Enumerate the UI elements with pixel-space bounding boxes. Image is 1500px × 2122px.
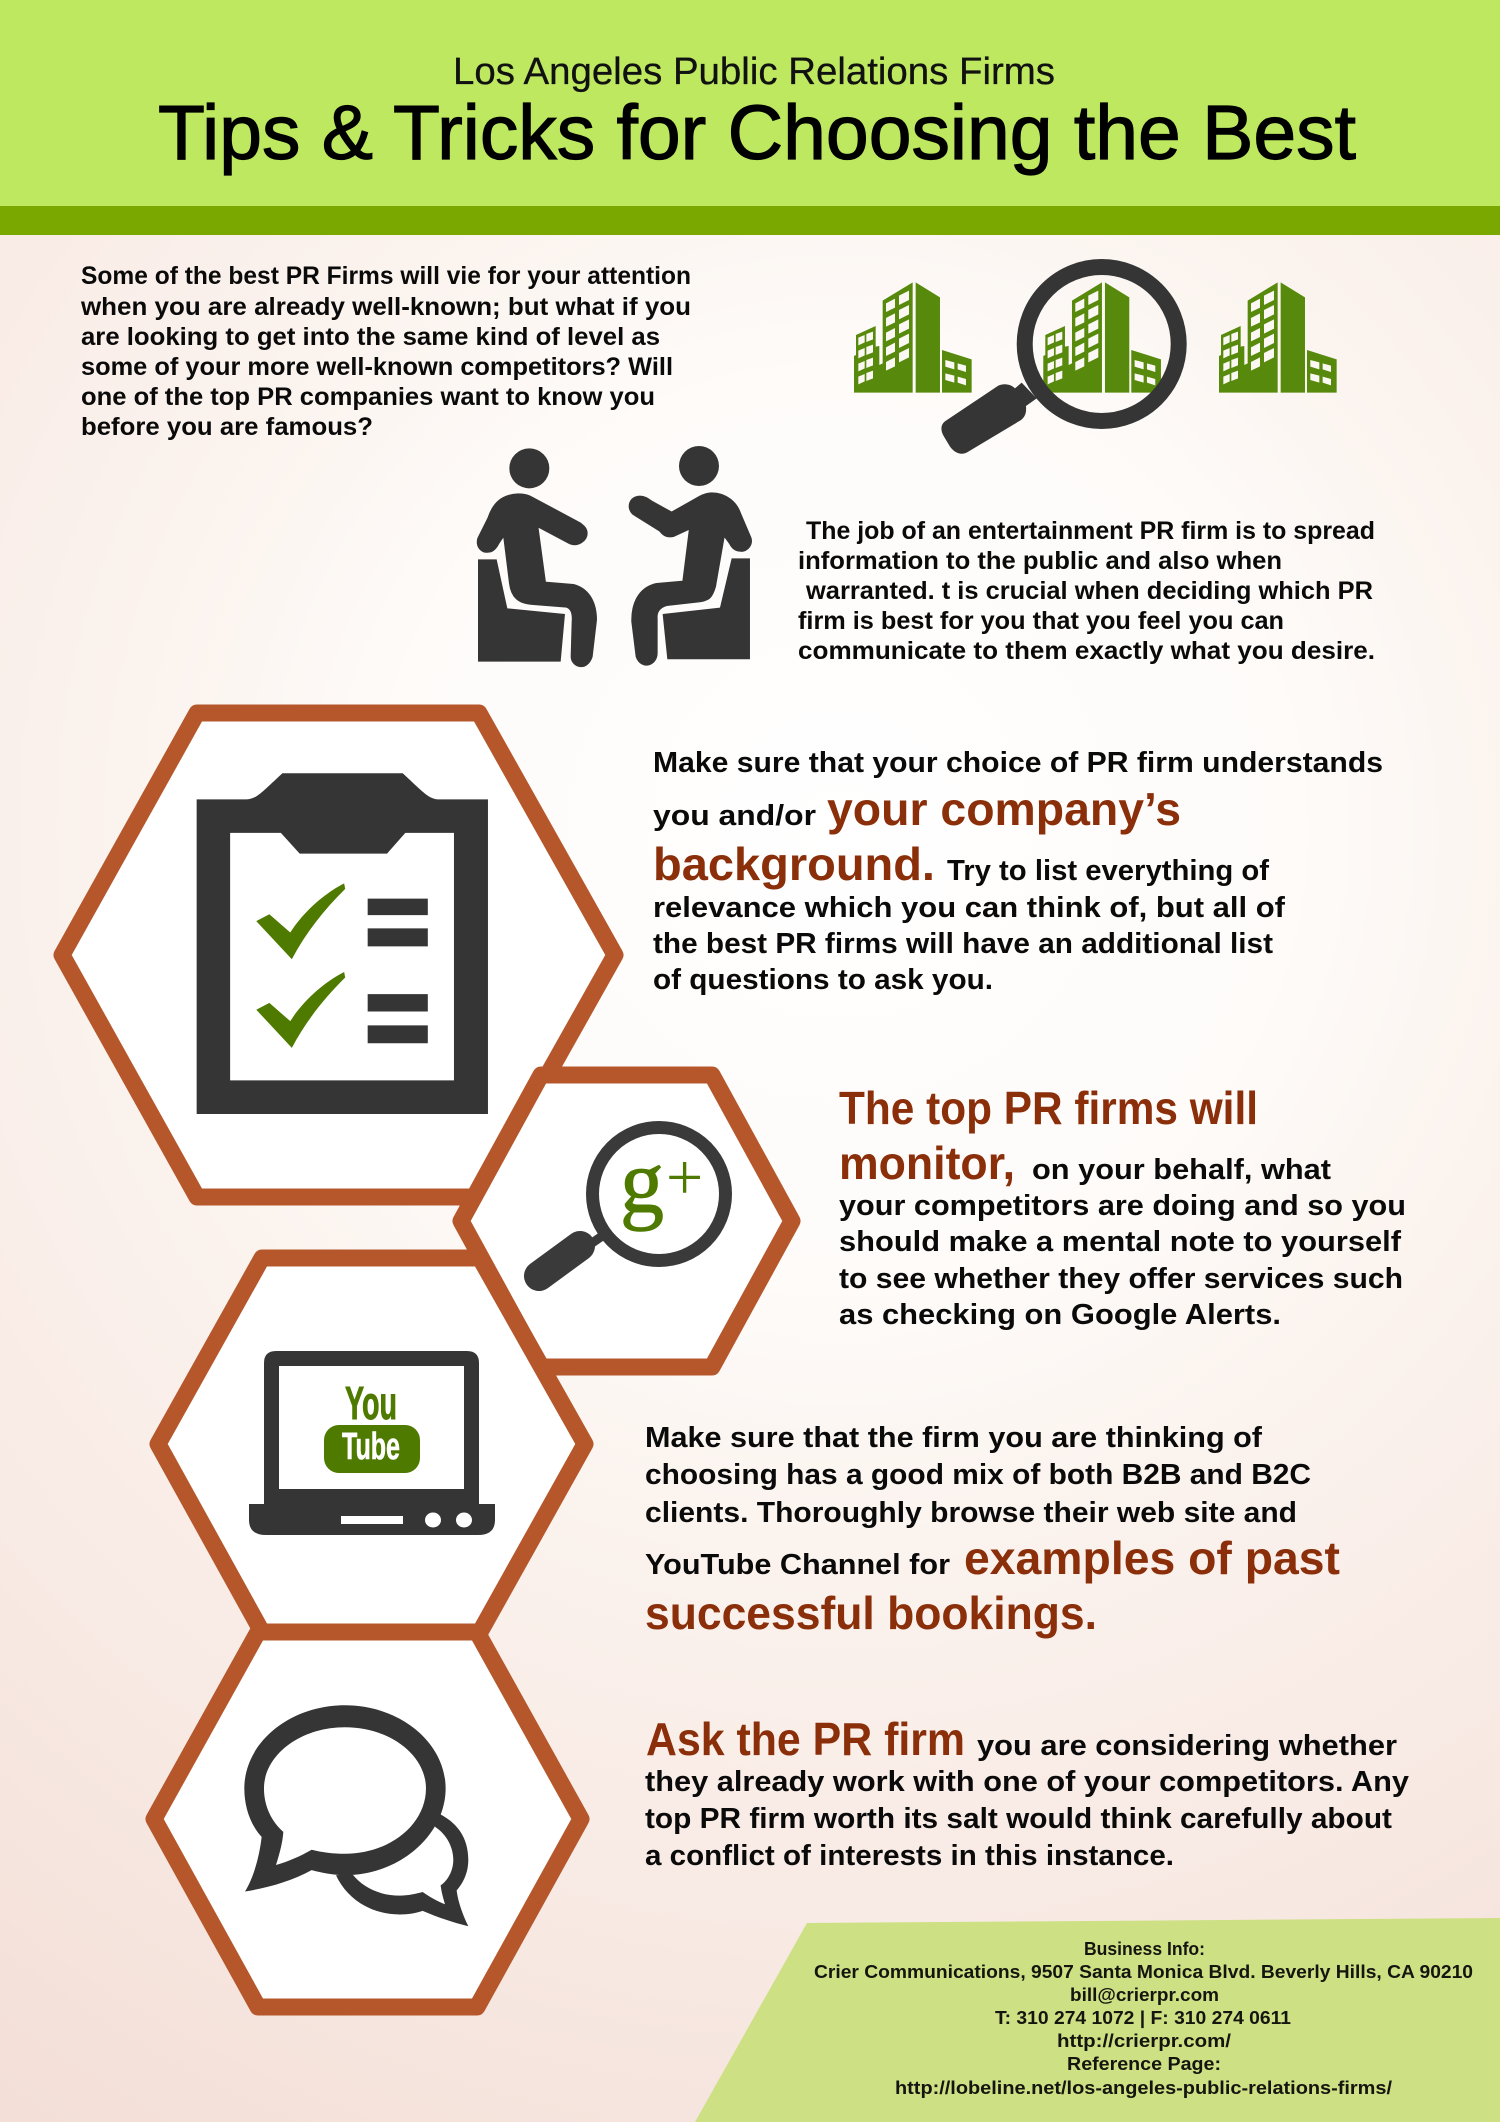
icon: clipboard checklist [197, 773, 488, 1114]
text block: monitoring competitors: on your behalf, what [1032, 1154, 1332, 1186]
icon: laptop with YouTube logo: Tube [342, 1426, 400, 1468]
text block: past bookings: Make sure that the firm you are thinking of [645, 1422, 1263, 1454]
title: Los Angeles Public Relations Firms [453, 51, 1055, 93]
hexagon: chat panel [154, 1632, 581, 2007]
icon: two seated people talking [478, 446, 751, 666]
footer panel: business info: http://crierpr.com/ [1057, 2031, 1231, 2051]
text block: company background: Try to list everything of [947, 855, 1270, 887]
intro text block: Some of the best PR Firms will vie for your attention [81, 262, 691, 290]
footer panel: business info: Business Info: [1084, 1939, 1205, 1959]
text block: role of a PR firm: The job of an entertainment PR firm is to spread [806, 517, 1375, 545]
text block: company background [653, 747, 1383, 996]
text block: conflict of interests: they already work with one of your competitors. Any [645, 1766, 1409, 1798]
text block: monitoring competitors [839, 1082, 1406, 1331]
text block: past bookings [645, 1422, 1340, 1639]
intro text block: before you are famous? [81, 413, 373, 441]
text block: past bookings: YouTube Channel for [645, 1549, 950, 1581]
text block: company background: your company’s [827, 783, 1181, 835]
intro text block [80, 262, 691, 441]
intro text block: are looking to get into the same kind of level as [81, 323, 660, 351]
footer panel: business info: Reference Page: [1067, 2054, 1221, 2074]
text block: conflict of interests: Ask the PR firm [646, 1713, 965, 1765]
intro text block: one of the top PR companies want to know you [81, 383, 655, 411]
text block: company background: Make sure that your choice of PR firm understands [653, 747, 1383, 779]
text block: monitoring competitors: should make a mental note to yourself [839, 1226, 1402, 1258]
text block: role of a PR firm: information to the public and also when [798, 547, 1282, 575]
text block: company background: background. [653, 838, 935, 890]
text block: role of a PR firm: warranted. t is crucial when deciding which PR [805, 577, 1373, 605]
icon: magnifier with g+ [539, 1128, 726, 1276]
footer panel: business info: T: 310 274 1072 | F: 310 274 0611 [995, 2008, 1291, 2028]
footer panel: business info: bill@crierpr.com [1070, 1985, 1219, 2005]
text block: company background: relevance which you can think of, but all of [653, 892, 1286, 924]
intro text block: when you are already well-known; but what if you [80, 293, 691, 321]
text block: past bookings: choosing has a good mix of both B2B and B2C [645, 1459, 1311, 1491]
text block: past bookings: successful bookings. [645, 1587, 1097, 1639]
text block: past bookings: examples of past [964, 1532, 1340, 1584]
icon: laptop with YouTube logo [249, 1351, 495, 1535]
text block: monitoring competitors: monitor, [839, 1137, 1015, 1189]
icon: magnifier with g+: + [666, 1141, 703, 1214]
title: Tips & Tricks for Choosing the Best [158, 90, 1356, 176]
text block: monitoring competitors: your competitors are doing and so you [839, 1190, 1406, 1222]
text block: role of a PR firm: communicate to them exactly what you desire. [798, 637, 1375, 665]
text block: company background: the best PR firms will have an additional list [653, 928, 1274, 960]
footer panel: business info: http://lobeline.net/los-angeles-public-relations-firms/ [895, 2078, 1392, 2098]
footer panel: business info: Crier Communications, 9507 Santa Monica Blvd. Beverly Hills, CA 90210 [814, 1962, 1473, 1982]
hexagon: YouTube panel [158, 1258, 585, 1632]
icon: laptop with YouTube logo: You [345, 1377, 397, 1429]
header banner [0, 0, 1500, 235]
title [158, 51, 1356, 176]
text block: monitoring competitors: as checking on Google Alerts. [839, 1299, 1281, 1331]
icon: magnifier with g+: g [620, 1133, 664, 1232]
text block: company background: you and/or [653, 800, 816, 832]
text block: role of a PR firm [798, 517, 1375, 665]
text block: past bookings: clients. Thoroughly browse their web site and [645, 1497, 1297, 1529]
text block: conflict of interests: top PR firm worth its salt would think carefully about [645, 1803, 1393, 1835]
intro text block: some of your more well-known competitors? Will [81, 353, 673, 381]
hexagon: clipboard panel [62, 713, 615, 1197]
text block: conflict of interests [645, 1713, 1409, 1872]
text block: monitoring competitors: to see whether they offer services such [839, 1263, 1403, 1295]
icon: buildings under magnifying glass [854, 267, 1337, 454]
footer panel: business info [695, 1918, 1500, 2122]
text block: conflict of interests: a conflict of interests in this instance. [645, 1840, 1174, 1872]
text block: company background: of questions to ask you. [653, 964, 993, 996]
text block: conflict of interests: you are considering whether [977, 1730, 1397, 1762]
text block: role of a PR firm: firm is best for you that you feel you can [798, 607, 1284, 635]
text block: monitoring competitors: The top PR firms will [839, 1082, 1258, 1134]
icon: speech bubbles [244, 1705, 468, 1926]
hexagon: Google Plus panel [461, 1075, 792, 1367]
